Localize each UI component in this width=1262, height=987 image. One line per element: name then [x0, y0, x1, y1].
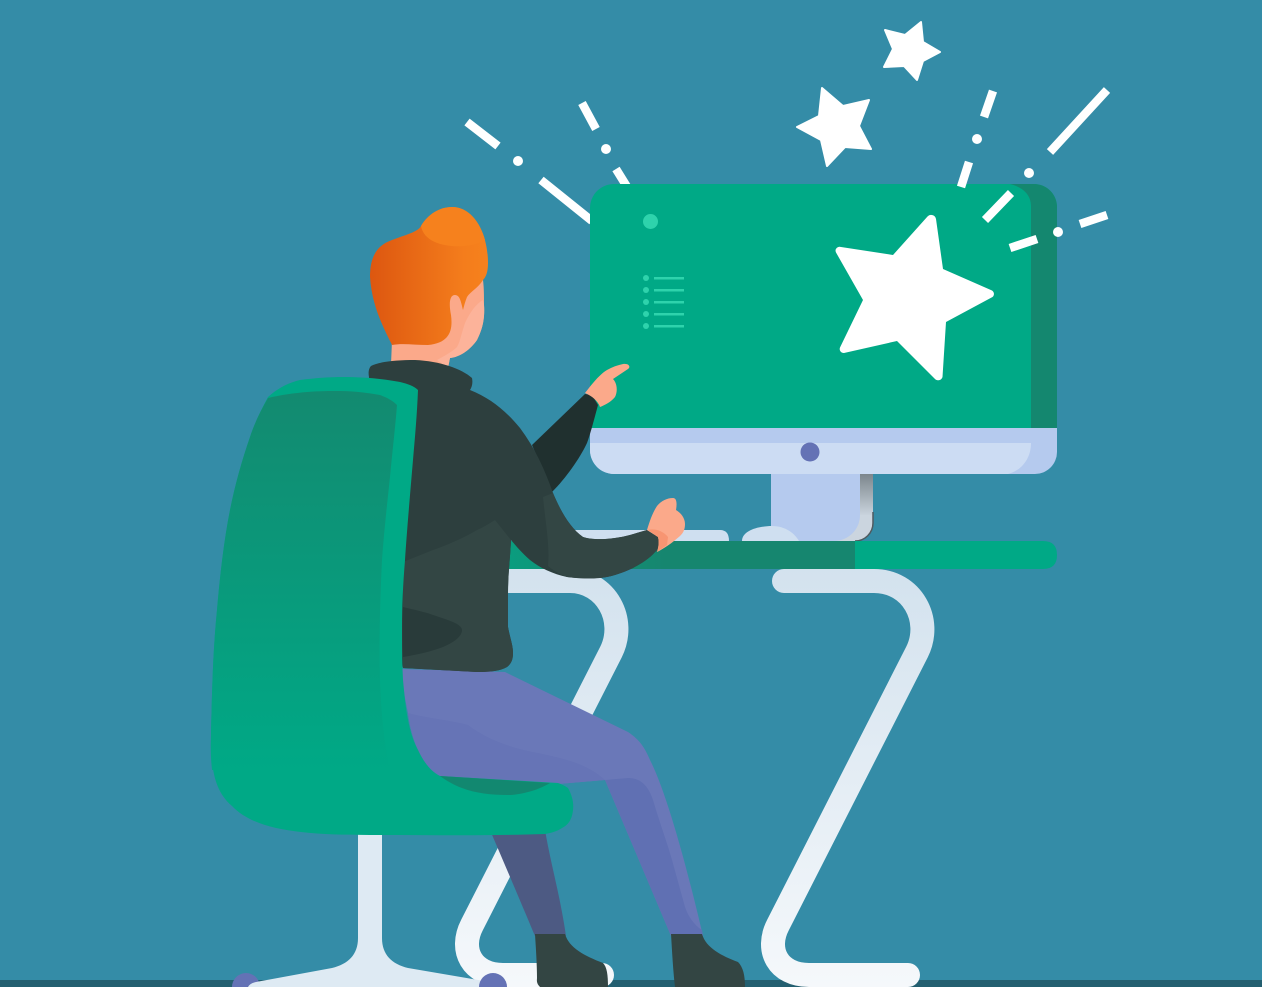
- burst rays left of the monitor: [467, 103, 629, 221]
- back leg: [490, 830, 566, 936]
- arm highlight: [543, 493, 659, 578]
- chair stem and base: [248, 830, 496, 987]
- lower hand: [647, 498, 685, 552]
- screen dot: [643, 214, 658, 229]
- back shoe: [535, 934, 608, 987]
- monitor screen: [590, 184, 1057, 428]
- hair: [370, 207, 488, 345]
- monitor button: [800, 442, 820, 462]
- chair back inner panel: [211, 391, 397, 770]
- monitor bezel: [590, 420, 1057, 474]
- small star: [884, 22, 940, 80]
- lower torso highlight: [403, 520, 513, 672]
- pants: [402, 669, 703, 936]
- burst rays right of the monitor: [961, 90, 1107, 248]
- desk top: [505, 541, 1057, 569]
- thigh shade: [408, 713, 605, 784]
- screen side shade: [1010, 184, 1057, 428]
- torso fold shadow: [403, 607, 462, 657]
- large star: [836, 215, 994, 380]
- pointing hand: [585, 364, 629, 407]
- mouse: [742, 526, 799, 541]
- chair caster left: [232, 973, 260, 987]
- monitor: [590, 184, 1057, 474]
- keyboard: [560, 530, 729, 541]
- screen list: [643, 275, 684, 329]
- torso and arm: [360, 360, 659, 672]
- chair shell and seat: [211, 377, 573, 835]
- monitor bezel front: [590, 443, 1031, 474]
- pants base shape: [402, 669, 703, 936]
- chair caster right: [479, 973, 507, 987]
- medium star: [797, 88, 871, 166]
- floor strip: [0, 980, 1262, 987]
- seat shade under thigh: [440, 776, 550, 795]
- torso: [360, 360, 659, 672]
- desk legs: [467, 581, 922, 975]
- monitor stand: [771, 470, 873, 541]
- back arm: [532, 394, 598, 492]
- lower leg shade: [605, 778, 703, 936]
- chair: [211, 377, 573, 835]
- front shoe: [671, 934, 745, 987]
- neck and face: [391, 280, 484, 368]
